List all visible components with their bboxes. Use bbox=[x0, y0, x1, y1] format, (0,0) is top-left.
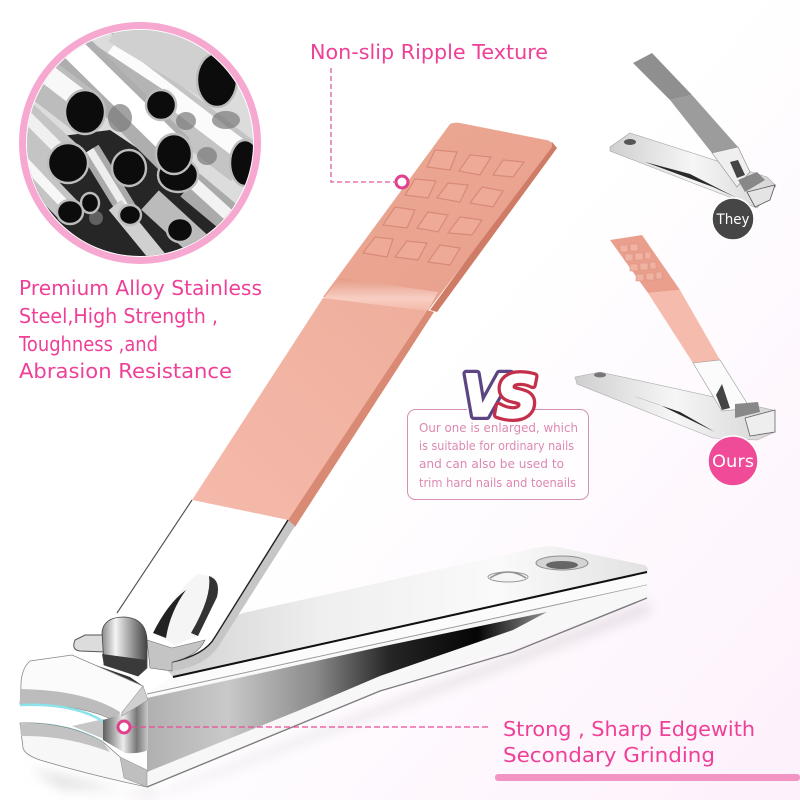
ripple squares bbox=[363, 150, 524, 265]
ground shadow bbox=[30, 602, 650, 797]
comparison clipper: They bbox=[610, 53, 776, 208]
lever silver section bbox=[117, 500, 288, 662]
callout heading: ripple texture: Non-slip Ripple Texture bbox=[310, 40, 548, 64]
comparison clipper: Ours bbox=[575, 235, 775, 440]
pink underline bar bbox=[495, 774, 800, 781]
hinge dome bbox=[102, 617, 147, 676]
lever loop bbox=[153, 574, 218, 645]
heading: material description: Premium Alloy Stainless bbox=[19, 276, 262, 300]
badge: Ours bbox=[708, 436, 758, 486]
lever rose lower section bbox=[192, 298, 427, 520]
callout text: sharp edge: Secondary Grinding bbox=[503, 743, 715, 767]
lever rose top section side bbox=[430, 142, 557, 312]
material photo: stainless steel tubes in pink ring bbox=[10, 15, 261, 270]
badge: Ours: Ours bbox=[712, 452, 754, 472]
badge: They bbox=[712, 198, 754, 240]
clipper side: dark wedge bbox=[147, 612, 547, 772]
VS emblem: S bbox=[496, 363, 538, 431]
comparison note box: Our one is enlarged, which bbox=[419, 421, 578, 435]
VS emblem: V bbox=[462, 362, 511, 430]
clipper side: lower bright band bbox=[147, 585, 648, 787]
VS emblem: S bbox=[496, 363, 538, 431]
cutting post bbox=[103, 698, 148, 753]
heading: material description: Toughness ,and bbox=[18, 332, 158, 356]
heading: material description: Abrasion Resistance bbox=[19, 359, 232, 383]
callout text: sharp edge: Strong , Sharp Edgewith bbox=[503, 717, 755, 741]
comparison note box: is suitable for ordinary nails bbox=[419, 439, 574, 453]
holes in plate bbox=[488, 556, 588, 582]
VS emblem bbox=[462, 362, 538, 431]
upper jaw bbox=[20, 655, 143, 722]
heading: material description: Steel,High Strength , bbox=[19, 304, 218, 328]
dashed pointer: cutting edge bbox=[118, 721, 491, 733]
comparison note box bbox=[408, 410, 588, 500]
badge: They: They bbox=[716, 212, 750, 228]
lever bend highlight bbox=[323, 278, 438, 312]
comparison note box: trim hard nails and toenails bbox=[419, 476, 576, 490]
clipper side: strip below top edge bbox=[147, 572, 648, 697]
main nail clipper bbox=[20, 123, 650, 797]
front block top edge bbox=[30, 655, 143, 686]
lever rose top section with ripple bbox=[323, 123, 552, 312]
VS emblem: V bbox=[462, 362, 511, 430]
lower jaw bbox=[20, 723, 147, 787]
jaw opening with cyan edge bbox=[20, 704, 104, 741]
hinge wings bbox=[74, 635, 105, 652]
comparison note box: and can also be used to bbox=[419, 457, 564, 471]
clipper base plate top bbox=[150, 546, 648, 677]
heading: material description bbox=[18, 276, 262, 383]
dashed pointer: ripple texture bbox=[331, 68, 408, 188]
lever silver edges bbox=[172, 520, 295, 671]
lever foot bbox=[147, 640, 205, 671]
callout text: sharp edge bbox=[503, 717, 755, 767]
lever rose lower section side bbox=[288, 310, 434, 527]
